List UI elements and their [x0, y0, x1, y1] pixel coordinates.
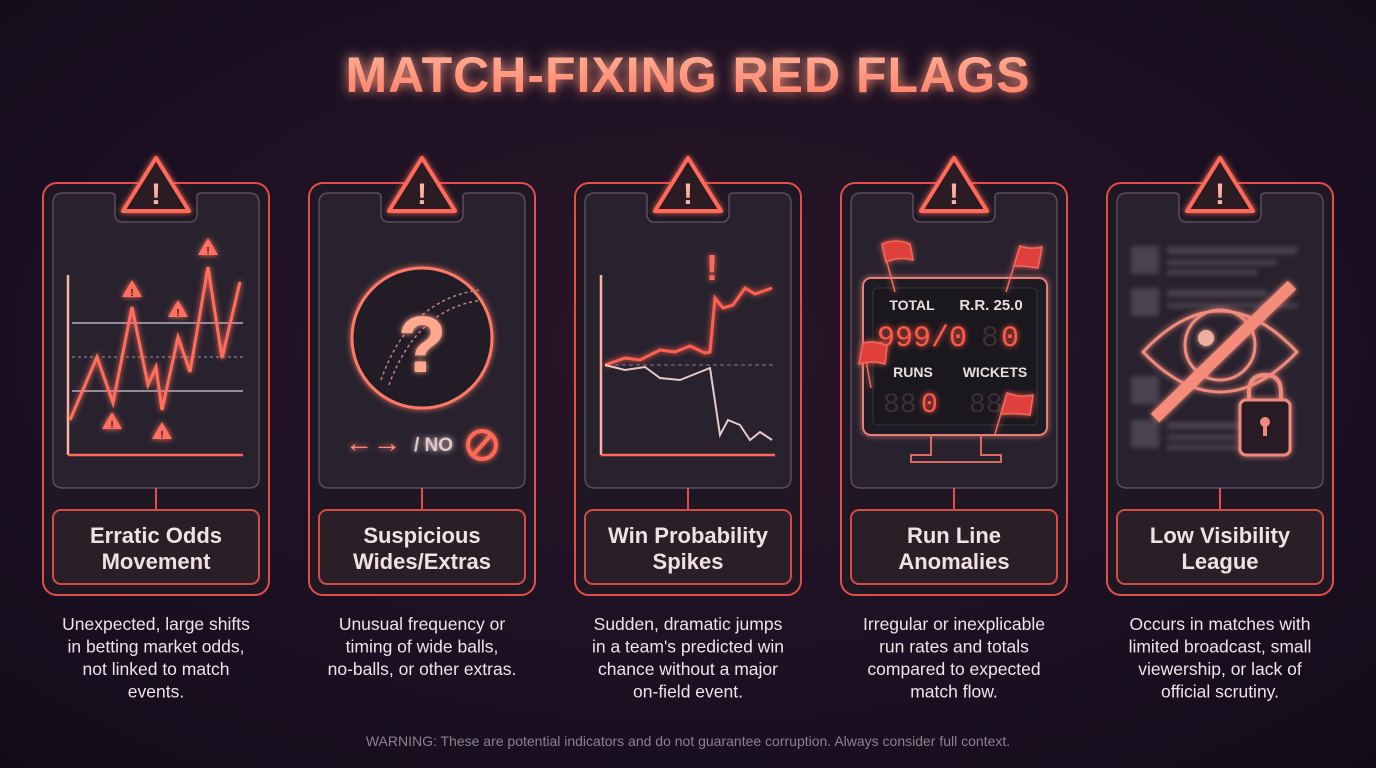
icon: scoreboard monitor with flags: 8	[981, 322, 999, 356]
icon: warning triangle	[1187, 158, 1253, 211]
icon: arrows / NO: ←→	[345, 427, 401, 458]
icon: warning triangle: !	[949, 178, 959, 211]
icon: warning triangle	[123, 158, 189, 211]
text: description 4: match flow.	[910, 682, 998, 702]
text: description 2: timing of wide balls,	[346, 636, 498, 656]
card 2: suspicious wides/extras	[309, 158, 535, 595]
icon: scoreboard monitor with flags: WICKETS	[963, 364, 1027, 380]
icon: warning triangle	[655, 158, 721, 211]
line chart: odds: !	[160, 430, 164, 441]
label: Run Line	[907, 523, 1001, 548]
label: Anomalies	[898, 549, 1010, 574]
text: description 3: in a team's predicted win	[592, 636, 784, 656]
text: description 1: not linked to match	[83, 659, 229, 679]
line chart: odds	[68, 238, 243, 455]
card 1: erratic odds movement	[43, 158, 269, 595]
footer warning: WARNING: These are potential indicators and do not guarantee corruption. Always consider full context.	[366, 733, 1010, 749]
icon: warning triangle: !	[683, 178, 693, 211]
label: Suspicious	[363, 523, 481, 548]
icon: warning triangle: !	[417, 178, 427, 211]
text: description 3: Sudden, dramatic jumps	[594, 614, 783, 634]
card 3: win probability spikes	[575, 158, 801, 595]
card 5: low visibility league	[1107, 158, 1333, 595]
line chart: odds: !	[110, 420, 114, 431]
label: Win Probability	[608, 523, 769, 548]
line chart: odds: !	[130, 288, 134, 299]
label: Low Visibility	[1150, 523, 1291, 548]
icon: crossed eye with lock	[1143, 285, 1297, 455]
text: description 1: events.	[128, 682, 184, 702]
label	[851, 510, 1057, 584]
text: description 5: Occurs in matches with	[1130, 614, 1310, 634]
label	[53, 510, 259, 584]
label: Wides/Extras	[353, 549, 491, 574]
icon: warning triangle	[389, 158, 455, 211]
descriptions	[62, 614, 1311, 702]
line chart: odds: !	[176, 308, 180, 319]
connectors between cards	[269, 352, 1107, 354]
label: Erratic Odds	[90, 523, 222, 548]
icon: warning triangle: !	[1215, 178, 1225, 211]
text: description 4: Irregular or inexplicable	[863, 614, 1045, 634]
text: description 4: compared to expected	[867, 659, 1041, 679]
label	[319, 510, 525, 584]
line chart: win probability	[601, 247, 775, 455]
label	[1117, 510, 1323, 584]
icon: warning triangle	[921, 158, 987, 211]
icon: scoreboard monitor with flags: R.R. 25.0	[959, 297, 1023, 314]
text: description 1: in betting market odds,	[67, 636, 245, 656]
icon: scoreboard monitor with flags: 88	[883, 390, 917, 421]
text: description 3: chance without a major	[598, 659, 778, 679]
icon: scoreboard monitor with flags: 888	[969, 390, 1019, 421]
icon: scoreboard monitor with flags: RUNS	[893, 364, 933, 380]
icon: arrows / NO	[345, 427, 496, 459]
icon: warning triangle: !	[151, 178, 161, 211]
text: description 5: limited broadcast, small	[1129, 636, 1311, 656]
icon: scoreboard monitor with flags: 0	[921, 390, 938, 421]
icon: cricket ball with question mark: ?	[398, 300, 446, 389]
icon: scoreboard monitor with flags	[859, 241, 1047, 462]
label: Spikes	[653, 549, 723, 574]
text: description 2: no-balls, or other extras.	[328, 659, 516, 679]
icon: scoreboard monitor with flags: TOTAL	[889, 297, 935, 313]
icon: scoreboard monitor with flags: 999/0	[877, 322, 967, 356]
icon: cricket ball with question mark	[352, 268, 492, 408]
label: League	[1181, 549, 1259, 574]
label: Movement	[102, 549, 211, 574]
line chart: win probability: !	[706, 247, 718, 288]
blurred league list	[1131, 246, 1297, 450]
text: description 5: official scrutiny.	[1161, 682, 1279, 702]
icon: arrows / NO: / NO	[414, 435, 453, 456]
title: MATCH-FIXING RED FLAGS	[346, 47, 1030, 103]
text: description 3: on-field event.	[633, 682, 743, 702]
label	[585, 510, 791, 584]
card 4: run line anomalies	[841, 158, 1067, 595]
text: description 5: viewership, or lack of	[1138, 659, 1302, 679]
icon: scoreboard monitor with flags: 0	[1001, 322, 1019, 356]
line chart: odds: !	[206, 246, 210, 257]
text: description 2: Unusual frequency or	[339, 614, 505, 634]
text: description 1: Unexpected, large shifts	[62, 614, 250, 634]
text: description 4: run rates and totals	[879, 636, 1029, 656]
